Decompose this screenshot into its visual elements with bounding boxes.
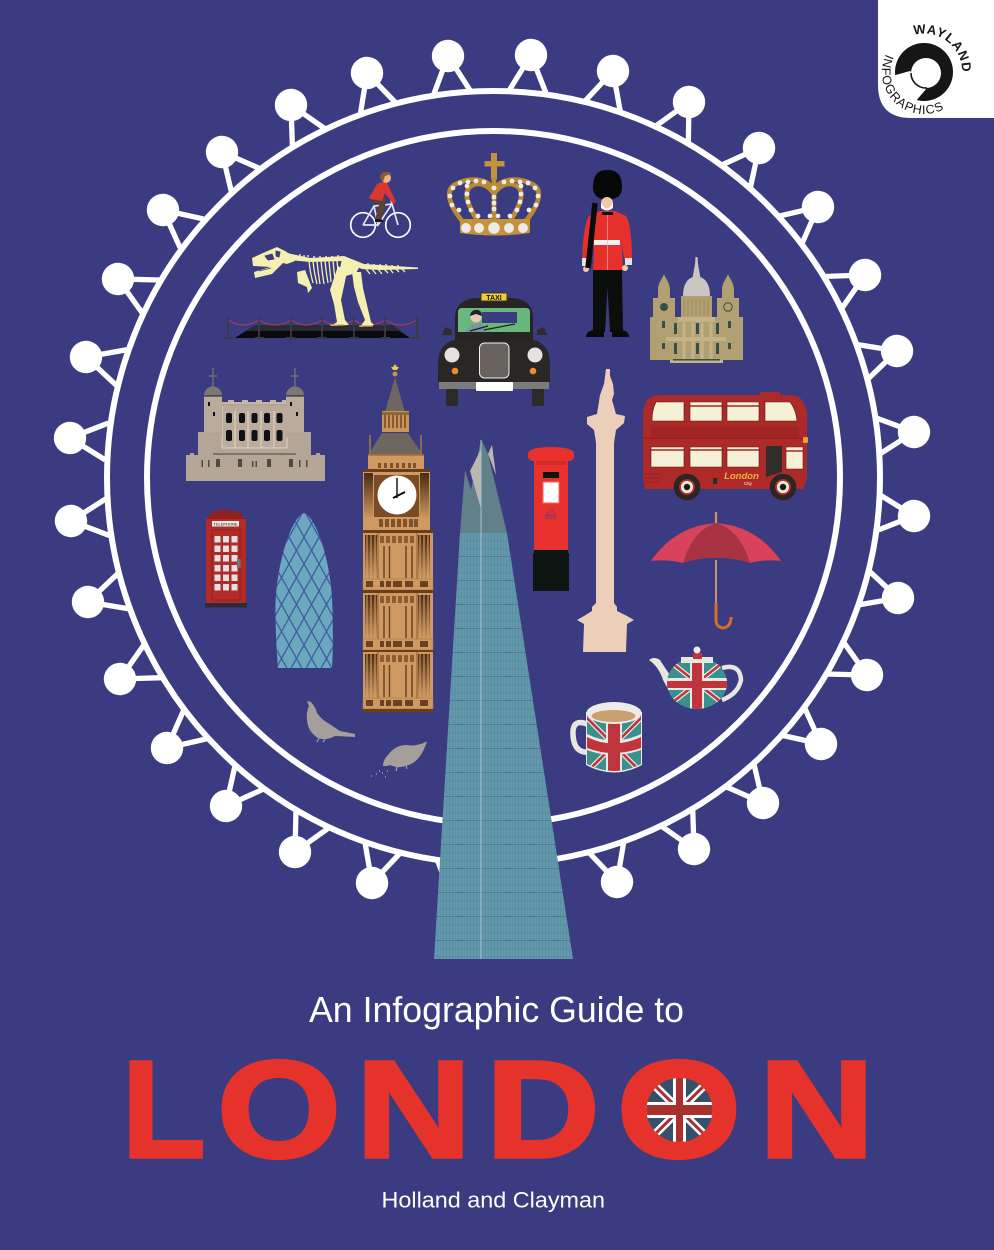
icon: Union Jack teapot xyxy=(649,646,741,711)
title: LONDON: O xyxy=(617,1032,741,1187)
title: LONDON: N xyxy=(356,1032,471,1187)
icon: double-decker bus: London xyxy=(724,471,759,482)
icon: red telephone box: TELEPHONE xyxy=(213,522,238,527)
icon: red post box xyxy=(528,447,574,591)
subtitle: An Infographic Guide to xyxy=(309,989,684,1030)
icon: double-decker bus xyxy=(643,392,808,500)
icon: the Shard xyxy=(434,439,573,959)
icon: umbrella xyxy=(651,512,781,628)
badge: Wayland Infographics logo: WAYLAND xyxy=(913,24,971,71)
icon: Nelson's Column xyxy=(577,369,634,652)
icon: dinosaur skeleton exhibit xyxy=(224,247,421,338)
icon: cyclist xyxy=(351,172,410,237)
title: LONDON: L xyxy=(122,1033,205,1187)
title: LONDON: O xyxy=(217,1032,341,1187)
title: LONDON: N xyxy=(759,1032,874,1187)
authors: Holland and Clayman xyxy=(382,1188,605,1212)
icon: St Paul's Cathedral xyxy=(650,257,743,363)
icon: pigeon feeding xyxy=(371,742,427,777)
London Eye wheel xyxy=(52,37,932,904)
title: LONDON xyxy=(122,1032,874,1187)
icon: Union Jack mug with tea xyxy=(573,702,642,777)
title: LONDON: D xyxy=(486,1033,600,1187)
badge: Wayland Infographics logo: INFOGRAPHICS xyxy=(882,55,943,114)
icon: Union Jack in the letter O xyxy=(646,1078,712,1142)
icon: London taxi xyxy=(438,293,550,406)
icon: red telephone box xyxy=(205,510,247,608)
icon: Queen's guard xyxy=(582,170,632,337)
icon: London taxi: TAXI xyxy=(486,295,502,302)
icon: crown xyxy=(448,153,540,236)
badge: Wayland Infographics logo xyxy=(878,0,994,118)
icon: the Gherkin xyxy=(275,513,333,668)
icon: Tower of London xyxy=(186,368,325,481)
icon: pigeon standing xyxy=(307,701,355,742)
icon: Big Ben xyxy=(363,364,433,712)
icon: double-decker bus: City xyxy=(744,481,753,486)
